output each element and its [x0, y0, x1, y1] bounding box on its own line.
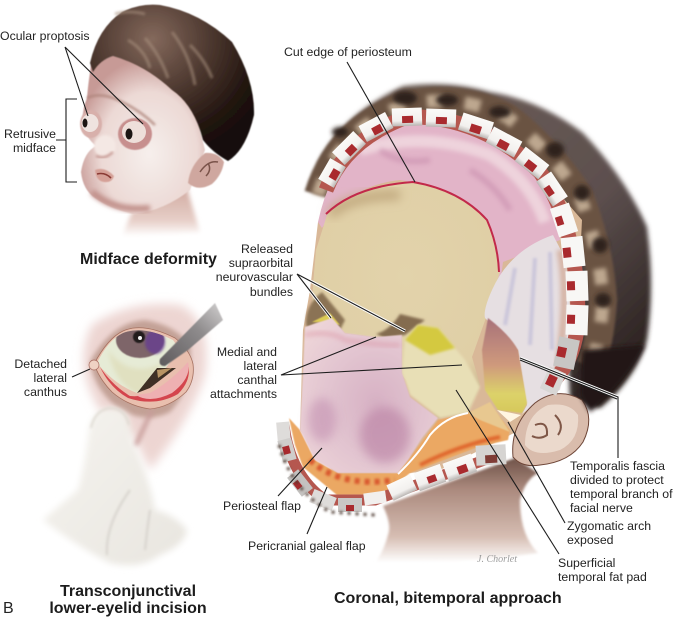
far eye [80, 110, 102, 138]
hair knots [332, 91, 611, 372]
leader: medial and lateral canthal attachments [281, 337, 462, 375]
hair highlights [115, 12, 212, 85]
hair mass [318, 84, 651, 408]
label: retrusive midface: midface [13, 141, 56, 155]
eyebrow [87, 95, 155, 125]
label: detached lateral canthus: canthus [24, 385, 67, 399]
pink lid tissue [136, 362, 189, 399]
hair near ear [580, 345, 645, 412]
near eye [118, 118, 152, 150]
blade [137, 368, 176, 393]
leader: zygomatic arch [508, 422, 565, 523]
leader: superficial temporal fat pad [456, 390, 559, 554]
label: periosteal flap: Periosteal flap [223, 499, 301, 513]
glove [43, 408, 187, 565]
label: ocular proptosis: Ocular proptosis [0, 29, 90, 43]
sclera tint [110, 354, 162, 392]
eyelid rim [94, 328, 193, 409]
scalp edge under clips [326, 117, 578, 381]
heading: coronal bitemporal approach: Coronal, bitemporal approach [334, 590, 562, 607]
illustration: transconjunctival eye and gloved finger [43, 303, 223, 565]
mouth [95, 169, 114, 182]
label: medial and lateral canthal attachments: attachments [210, 387, 277, 401]
leader: temporalis fascia [520, 358, 618, 458]
leader: cut edge of periosteum [347, 62, 415, 182]
scalp clips: lower series [276, 422, 507, 512]
label: medial and lateral canthal attachments: canthal [237, 373, 277, 387]
superficial temporal fat pad [482, 318, 527, 413]
illustration: coronal bitemporal approach [276, 84, 651, 563]
label: superficial temporal fat pad: Superficial [558, 556, 615, 570]
skull upper shading [330, 195, 400, 215]
label: zygomatic arch exposed: exposed [567, 533, 614, 547]
neck [122, 185, 200, 236]
lower hair fringe [279, 445, 375, 515]
base of head [300, 120, 582, 480]
heading: midface deformity: Midface deformity [80, 251, 217, 268]
label: superficial temporal fat pad: temporal fat pad [558, 570, 647, 584]
ear [513, 394, 589, 466]
face [81, 55, 205, 214]
heading: transconjunctival lower-eyelid incision: Transconjunctival [60, 583, 196, 600]
leader: ocular proptosis [65, 47, 143, 124]
leader: detached lateral canthus [72, 369, 90, 377]
cut edge of periosteum [326, 182, 499, 272]
label: temporalis fascia: facial nerve [570, 501, 633, 515]
canthus nodule [89, 360, 99, 370]
cheek fold [136, 410, 152, 445]
label: detached lateral canthus: Detached [14, 357, 67, 371]
iris [115, 330, 164, 359]
label: cut edge of periosteum: Cut edge of periosteum [284, 45, 412, 59]
scalp edge under lower clips [284, 425, 490, 500]
yellow orbit fat [402, 325, 480, 418]
lash shadow [90, 320, 191, 418]
label: medial and lateral canthal attachments: lateral [244, 359, 277, 373]
skin surround [84, 304, 206, 470]
instrument handle [160, 303, 223, 366]
eyeball [97, 330, 180, 393]
braided hair [318, 101, 603, 367]
nose [94, 135, 116, 157]
label: temporalis fascia: divided to protect [570, 473, 664, 487]
heading: transconjunctival lower-eyelid incision: lower-eyelid incision [49, 600, 207, 617]
label: released supraorbital neurovascular bundles: Released [241, 242, 293, 256]
periosteal flap [300, 318, 438, 473]
neck [376, 458, 538, 563]
leader: pericranial galeal flap [307, 487, 327, 534]
label: retrusive midface: Retrusive [4, 127, 56, 141]
leader: periosteal flap [278, 448, 322, 496]
galeal flap [289, 405, 510, 495]
label: released supraorbital neurovascular bundles: neurovascular [216, 270, 293, 284]
label: pericranial galeal flap: Pericranial galeal flap [248, 539, 366, 553]
label: detached lateral canthus: lateral [34, 371, 67, 385]
zygomatic tip [497, 410, 521, 422]
orbits and brow [306, 292, 345, 330]
white flap edge [398, 413, 468, 474]
scalp clips: upper series [318, 107, 589, 396]
pink periosteum [318, 124, 560, 285]
label: zygomatic arch exposed: Zygomatic arch [567, 519, 651, 533]
label: medial and lateral canthal attachments: Medial and [217, 345, 277, 359]
label: temporalis fascia: temporal branch of [570, 487, 673, 501]
panel letter: B [3, 600, 14, 617]
flap mottling [360, 407, 410, 463]
signature: J. Chorlet [477, 554, 517, 565]
label: temporalis fascia: Temporalis fascia [570, 459, 665, 473]
temporalis fascia [485, 235, 572, 414]
skull bone [312, 182, 500, 418]
lower lid mucosa [100, 364, 189, 402]
bracket: retrusive midface [56, 99, 77, 182]
label: released supraorbital neurovascular bundles: bundles [250, 285, 293, 299]
ear [188, 153, 224, 188]
label: released supraorbital neurovascular bundles: supraorbital [229, 256, 293, 270]
fingertip outline [91, 408, 129, 428]
chin shadow [92, 192, 150, 209]
leader: released supraorbital bundles [297, 274, 405, 331]
hair [90, 5, 254, 161]
knuckle crease [107, 490, 150, 555]
illustration: child head with midface deformity [80, 5, 254, 236]
